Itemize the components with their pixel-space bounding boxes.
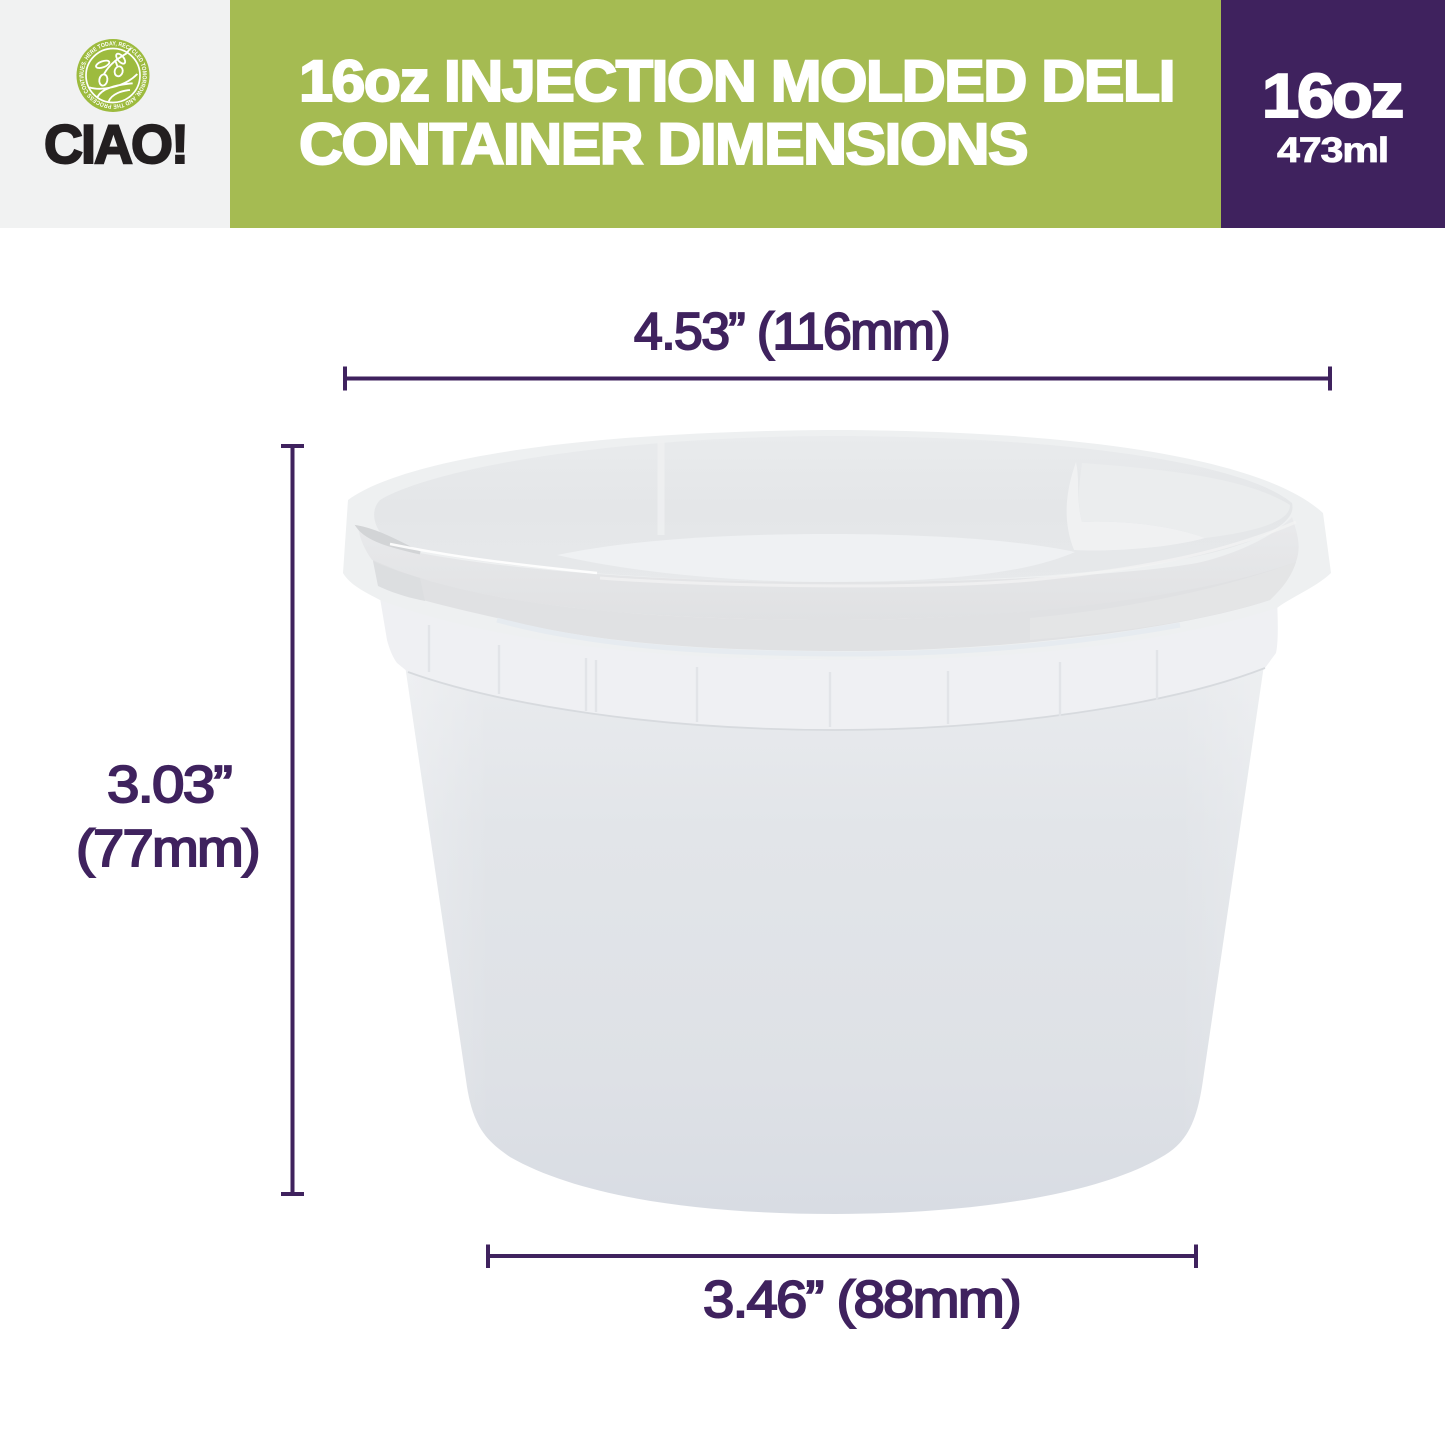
height label: [76, 756, 259, 878]
height label: (77mm): [76, 820, 259, 878]
title: 16oz INJECTION MOLDED DELI: [299, 49, 1174, 114]
height arrow: [281, 446, 304, 1194]
title: CONTAINER DIMENSIONS: [299, 112, 1027, 177]
height label: 3.03”: [107, 756, 231, 814]
capacity in millilitres: 473ml: [1277, 131, 1388, 170]
icon: round olive branch badge: AND THE PROCESS CONTINUES. HERE TODAY, RECYCLED TOMORROW.: [79, 41, 147, 109]
header: title banner: [230, 0, 1221, 228]
container body: [405, 665, 1264, 1214]
header: capacity badge: [1221, 0, 1445, 228]
top diameter arrow: [345, 366, 1330, 390]
base diameter arrow: [488, 1244, 1196, 1268]
lid sealing ring: [358, 517, 1299, 620]
lid recessed top: [374, 436, 1293, 582]
height dimension: [76, 446, 304, 1194]
deli container photo: [343, 430, 1331, 1214]
title: [299, 49, 1174, 177]
base diameter dimension: [488, 1244, 1196, 1329]
header: logo panel: [0, 0, 230, 228]
logo wordmark: CIAO!: [44, 113, 187, 175]
lid centre disc: [557, 534, 1075, 582]
capacity in ounces: 16oz: [1262, 62, 1402, 131]
container rim band: [380, 598, 1278, 730]
base diameter label: 3.46” (88mm): [703, 1271, 1020, 1329]
top diameter label: 4.53” (116mm): [634, 303, 949, 361]
top diameter dimension: [345, 303, 1330, 390]
lid lower ring: [373, 560, 1296, 651]
container lid: [343, 430, 1331, 660]
